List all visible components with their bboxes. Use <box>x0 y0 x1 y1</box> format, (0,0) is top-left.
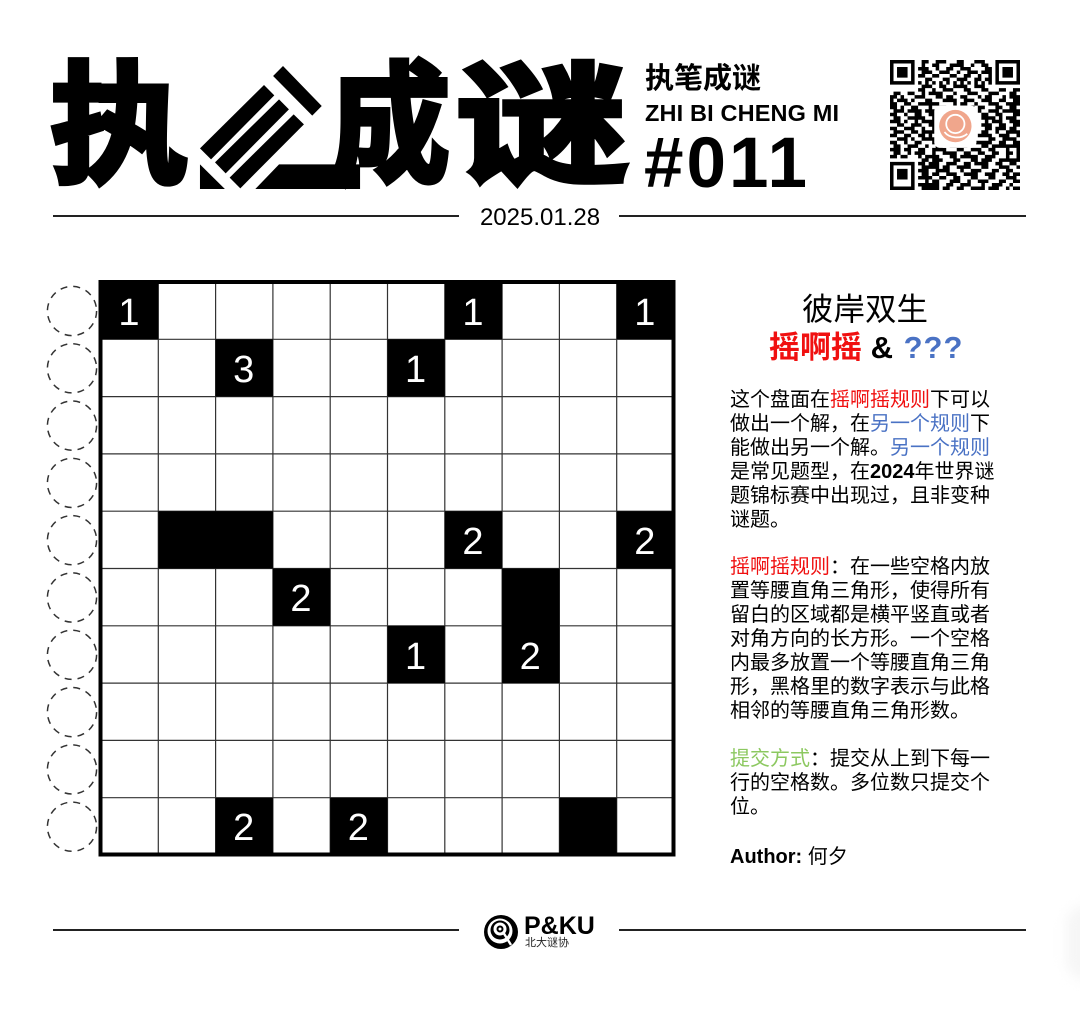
corner shadow <box>1066 905 1080 980</box>
wordmark logo: 执笔成谜 with pencil <box>50 53 630 200</box>
submission text: 提交方式：提交从上到下每一 <box>730 748 990 770</box>
series name: 执笔成谜 <box>645 63 761 95</box>
rules text: 摇啊摇规则：在一些空格内放 <box>730 556 990 578</box>
series pinyin: ZHI BI CHENG MI <box>645 100 839 126</box>
intro text: 是常见题型，在2024年世界谜 <box>730 461 994 483</box>
cell numbers: 2 <box>520 636 541 678</box>
date: 2025.01.28 <box>480 204 600 231</box>
intro text: 这个盘面在摇啊摇规则下可以 <box>730 389 990 411</box>
rules text: 对角方向的长方形。一个空格 <box>730 628 990 650</box>
logo character 执: 执 <box>50 53 188 200</box>
icon: pencil <box>200 66 360 189</box>
cell numbers: 1 <box>405 349 426 391</box>
cell numbers: 2 <box>634 521 655 563</box>
cell numbers: 2 <box>290 578 312 620</box>
grid border <box>100 282 674 854</box>
logo character 成: 成 <box>330 53 450 200</box>
cell numbers: 2 <box>233 807 254 849</box>
rules text: 相邻的等腰直角三角形数。 <box>730 700 970 722</box>
intro text: 做出一个解，在另一个规则下 <box>730 413 990 435</box>
intro text: 谜题。 <box>730 509 790 531</box>
header divider <box>53 215 1026 217</box>
intro text: 能做出另一个解。另一个规则 <box>730 437 990 459</box>
submission text: 行的空格数。多位数只提交个 <box>730 772 990 794</box>
rules text: 内最多放置一个等腰直角三角 <box>730 652 990 674</box>
cell numbers: 2 <box>348 807 369 849</box>
organization name: P&KU <box>524 912 595 940</box>
QR code <box>890 60 1020 190</box>
intro text: 题锦标赛中出现过，且非变种 <box>730 485 990 507</box>
cell numbers <box>118 292 655 849</box>
cell numbers: 1 <box>405 636 426 678</box>
logo character 谜: 谜 <box>456 53 628 200</box>
intro text <box>730 388 994 531</box>
rules text: 留白的区域都是横平竖直或者 <box>730 604 990 626</box>
submission text <box>730 748 990 818</box>
organization Chinese name: 北大谜协 <box>525 937 569 949</box>
answer circles <box>46 286 98 852</box>
cell numbers: 1 <box>118 292 140 334</box>
footer divider <box>53 929 1026 931</box>
rules text: 形，黑格里的数字表示与此格 <box>730 676 990 698</box>
rules text <box>730 556 990 722</box>
icon: swirl emblem <box>484 915 518 949</box>
black cells <box>101 282 674 855</box>
cell numbers: 2 <box>462 521 484 563</box>
submission text: 位。 <box>730 796 770 818</box>
cell numbers: 1 <box>462 292 484 334</box>
cell numbers: 3 <box>233 349 254 391</box>
rules text: 置等腰直角三角形，使得所有 <box>730 580 990 602</box>
author: Author: 何夕 <box>730 846 848 868</box>
issue number: #011 <box>644 124 810 203</box>
footer logo <box>484 912 595 949</box>
puzzle grid <box>98 280 676 856</box>
puzzle title: 彼岸双生 <box>802 291 928 327</box>
puzzle subtitle: 摇啊摇 & ??? <box>769 330 963 365</box>
cell numbers: 1 <box>634 292 655 334</box>
